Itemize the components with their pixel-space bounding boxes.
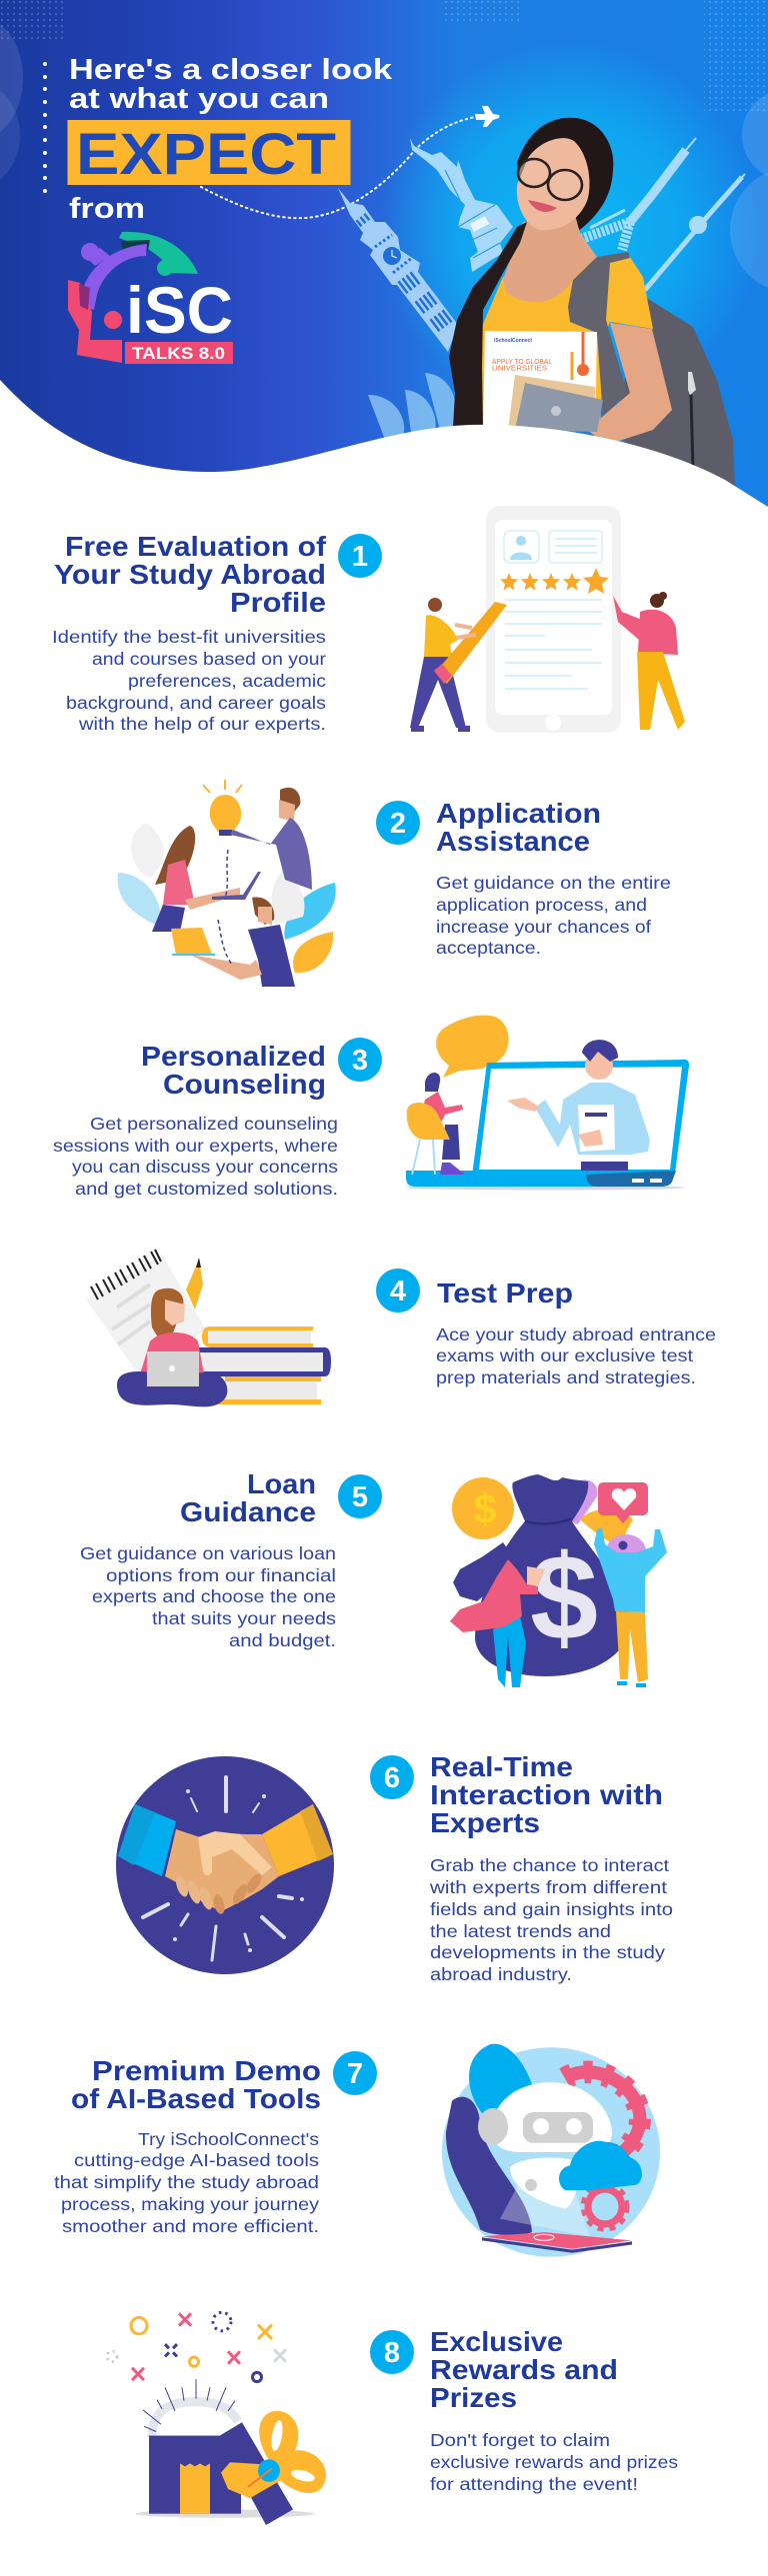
heading 8: Rewards and <box>430 2354 618 2385</box>
book: APPLY TO GLOBAL <box>492 359 552 366</box>
badge 1: 1 <box>352 541 368 573</box>
illustration: online counseling <box>405 1016 689 1190</box>
braid <box>449 222 527 428</box>
body 8: for attending the event! <box>430 2474 638 2494</box>
light rays <box>143 2379 238 2438</box>
box <box>149 2422 293 2525</box>
shirt <box>472 257 653 425</box>
badge 3 <box>338 1038 382 1082</box>
left dotted column <box>43 62 47 193</box>
gears <box>565 2072 640 2229</box>
body 6: the latest trends and <box>430 1921 611 1941</box>
body 1: and courses based on your <box>92 649 326 669</box>
badge 2: 2 <box>390 808 406 840</box>
body 4 <box>436 1324 716 1387</box>
title text: at what you can <box>69 83 329 115</box>
bow <box>221 2411 326 2498</box>
arm <box>587 323 672 445</box>
header banner <box>0 0 768 540</box>
heading 1: Free Evaluation of <box>65 531 327 562</box>
hair back <box>517 118 613 232</box>
eiffel tower <box>578 138 696 250</box>
badge 5 <box>338 1474 382 1518</box>
body 7: smoother and more efficient. <box>62 2216 319 2236</box>
body 5: options from our financial <box>106 1565 336 1585</box>
illustration: handshake <box>116 1756 334 1974</box>
heading 8: Prizes <box>430 2382 517 2413</box>
heading 6: Real-Time <box>430 1751 573 1782</box>
body 6: with experts from different <box>429 1877 667 1897</box>
neck and chest <box>503 215 597 302</box>
heading 2 <box>436 798 601 857</box>
body 4: Ace your study abroad entrance <box>436 1324 716 1344</box>
book: iSchoolConnect <box>494 338 532 344</box>
panel: step 5 loan guidance <box>80 1468 667 1687</box>
glasses <box>518 159 582 200</box>
badge 6 <box>370 1755 414 1799</box>
landmarks <box>338 138 745 440</box>
sleeves <box>118 1804 176 1876</box>
body 3: you can discuss your concerns <box>72 1157 338 1177</box>
cn tower <box>645 174 745 290</box>
icon: plane <box>475 106 500 127</box>
panel: step 4 test prep <box>86 1250 716 1406</box>
opera house <box>368 373 457 440</box>
smile <box>528 200 557 212</box>
body 6: fields and gain insights into <box>430 1899 673 1919</box>
heading 3: Personalized <box>141 1041 326 1072</box>
badge 4: 4 <box>390 1276 406 1307</box>
body 6 <box>429 1855 673 1984</box>
flight path <box>201 117 475 218</box>
face <box>517 138 589 230</box>
body 6: abroad industry. <box>430 1964 572 1984</box>
heading 8 <box>430 2326 618 2413</box>
badge 5: 5 <box>352 1481 368 1513</box>
heading 6: Experts <box>430 1807 540 1838</box>
iSC talks logo <box>68 232 233 364</box>
body 7 <box>54 2129 319 2236</box>
statue of liberty <box>410 138 513 272</box>
body 7: that simplify the study abroad <box>54 2172 319 2192</box>
badge 3: 3 <box>352 1045 368 1077</box>
panel: step 8 exclusive rewards <box>107 2312 678 2525</box>
body 5: that suits your needs <box>152 1608 336 1628</box>
body 4: prep materials and strategies. <box>436 1367 696 1387</box>
book <box>483 331 603 432</box>
body 5: experts and choose the one <box>92 1586 336 1606</box>
panel: step 1 free evaluation <box>52 506 685 734</box>
badge 2 <box>376 801 420 845</box>
body 6: developments in the study <box>430 1942 665 1962</box>
woman pointing <box>613 592 685 730</box>
badge 7 <box>333 2051 377 2095</box>
body 3: sessions with our experts, where <box>53 1136 338 1156</box>
illustration: AI robot <box>442 2044 660 2257</box>
coin: $ <box>473 1485 497 1532</box>
body 6: Grab the chance to interact <box>430 1855 669 1875</box>
panel: step 2 application assistance <box>118 780 671 987</box>
panel: step 6 real-time interaction <box>116 1751 673 1984</box>
body 2 <box>436 873 671 958</box>
body 2: acceptance. <box>436 938 541 958</box>
iSC talks logo: TALKS 8.0 <box>132 344 225 363</box>
man arms raised <box>594 1527 667 1687</box>
body 3 <box>53 1114 338 1199</box>
heading 5: Loan <box>247 1468 316 1499</box>
backpack <box>620 297 735 490</box>
hands <box>165 1829 279 1911</box>
heading 1 <box>54 531 327 618</box>
badge 1 <box>338 534 382 578</box>
body 1: Identify the best-fit universities <box>52 627 326 647</box>
heading 1: Profile <box>230 587 326 618</box>
iSC talks logo: iSC <box>126 273 233 347</box>
body 1: background, and career goals <box>66 693 326 713</box>
illustration: phone rating <box>410 506 685 733</box>
coin <box>452 1477 514 1539</box>
body 2: application process, and <box>436 895 647 915</box>
heading 5 <box>180 1468 316 1527</box>
body 1: with the help of our experts. <box>78 714 326 734</box>
dollar sign: $ <box>530 1529 598 1665</box>
badge 4 <box>376 1269 420 1312</box>
body 2: increase your chances of <box>436 917 651 937</box>
heading 6 <box>430 1751 663 1838</box>
illustration: team idea <box>118 780 336 987</box>
student photo <box>449 118 735 490</box>
heading 3: Counseling <box>163 1069 326 1100</box>
heading 5: Guidance <box>180 1496 316 1527</box>
like bubble <box>598 1482 648 1523</box>
body 5 <box>80 1543 336 1650</box>
panel: step 3 personalized counseling <box>53 1016 689 1199</box>
heading 2: Assistance <box>436 826 590 857</box>
heading 7 <box>71 2055 321 2114</box>
panel: step 7 premium demo <box>54 2044 660 2257</box>
badge 7: 7 <box>347 2058 363 2090</box>
from label: from <box>69 193 145 225</box>
body 4: exams with our exclusive test <box>436 1345 693 1365</box>
badge 8 <box>370 2330 414 2374</box>
heading 6: Interaction with <box>430 1779 663 1810</box>
title text <box>69 54 393 115</box>
body 7: Try iSchoolConnect's <box>138 2129 319 2149</box>
body 3: and get customized solutions. <box>75 1179 338 1199</box>
white wave <box>0 380 768 540</box>
body 8 <box>430 2430 678 2494</box>
man with pencil <box>410 598 507 732</box>
expect highlight: EXPECT <box>76 122 336 187</box>
body 7: cutting-edge AI-based tools <box>74 2150 319 2170</box>
cloud <box>559 2141 642 2190</box>
heading 3 <box>141 1041 326 1100</box>
heading 1: Your Study Abroad <box>54 559 326 590</box>
body 8: Don't forget to claim <box>430 2430 610 2450</box>
badge 8: 8 <box>384 2337 400 2369</box>
body 2: Get guidance on the entire <box>436 873 671 893</box>
book: UNIVERSITIES <box>492 366 547 372</box>
illustration: study girl and books <box>86 1250 331 1406</box>
body 1: preferences, academic <box>128 671 326 691</box>
body 3: Get personalized counseling <box>90 1114 338 1134</box>
body 8: exclusive rewards and prizes <box>430 2452 678 2472</box>
illustration: money bag <box>450 1474 667 1687</box>
big ben <box>338 188 458 352</box>
heading 4: Test Prep <box>437 1278 573 1308</box>
heading 7: Premium Demo <box>92 2055 321 2086</box>
confetti <box>107 2312 286 2382</box>
body 7: process, making your journey <box>61 2194 319 2214</box>
title text: Here's a closer look <box>69 54 393 86</box>
heading 7: of AI-Based Tools <box>71 2083 321 2114</box>
body 1 <box>52 627 326 734</box>
body 5: Get guidance on various loan <box>80 1543 336 1563</box>
woman with clipboard <box>450 1542 545 1687</box>
badge 6: 6 <box>384 1762 400 1794</box>
body 5: and budget. <box>229 1630 336 1650</box>
strap <box>568 252 630 417</box>
heading 2: Application <box>436 798 601 829</box>
illustration: gift box <box>107 2312 326 2525</box>
heading 8: Exclusive <box>430 2326 563 2357</box>
tablet <box>482 2232 632 2253</box>
